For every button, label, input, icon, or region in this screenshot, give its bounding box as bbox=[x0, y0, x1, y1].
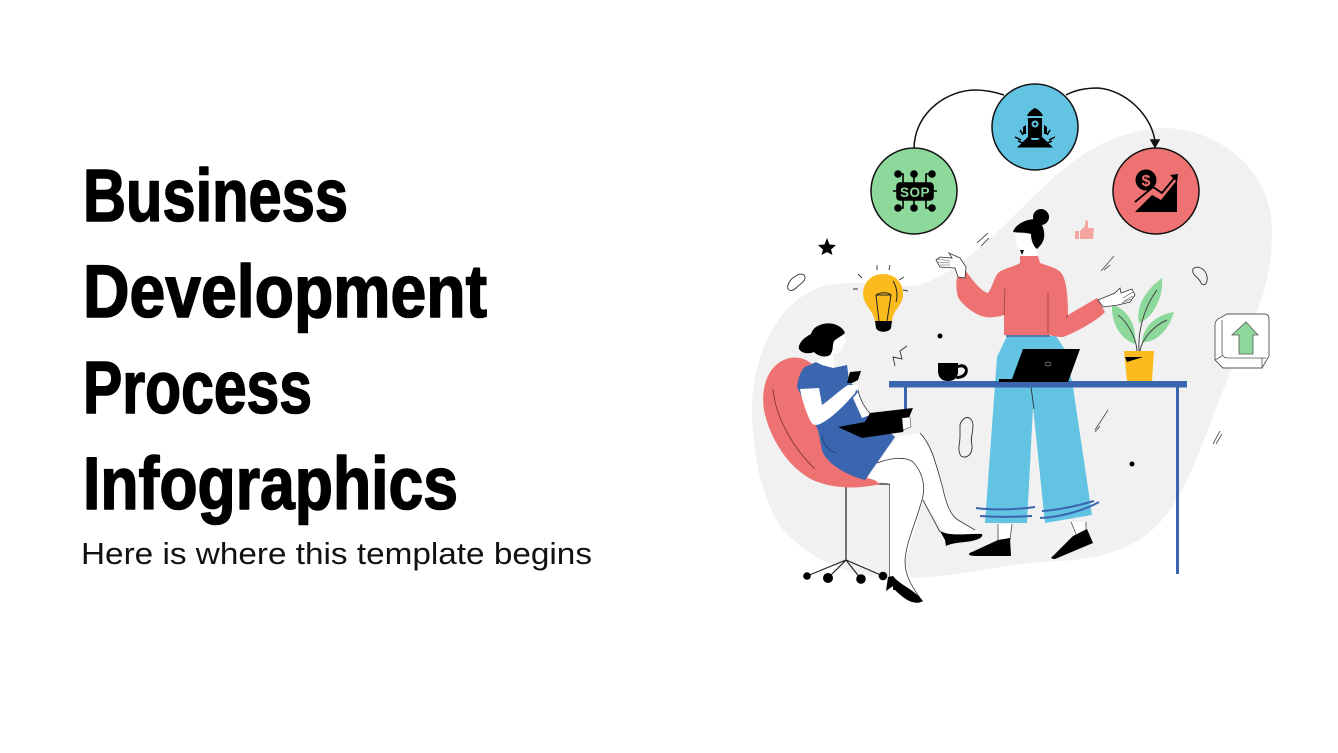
step: rocket circle bbox=[992, 84, 1078, 170]
table with items bbox=[889, 349, 1187, 574]
tablet bbox=[838, 408, 913, 438]
dress bbox=[797, 362, 895, 480]
step: revenue circle bbox=[1113, 148, 1199, 234]
legs bbox=[867, 433, 982, 600]
squiggle beans bbox=[788, 267, 1207, 457]
icon: star bbox=[818, 238, 836, 255]
shoes bbox=[969, 529, 1093, 559]
decorative marks bbox=[977, 233, 1222, 444]
process arrows bbox=[914, 88, 1159, 148]
neck bbox=[816, 352, 835, 368]
title: Process bbox=[83, 346, 312, 429]
title: Infographics bbox=[83, 442, 458, 525]
illustration background blob bbox=[752, 128, 1272, 578]
icon: thumbs up bbox=[1075, 220, 1094, 239]
chair base bbox=[807, 484, 890, 579]
waistband bbox=[1006, 334, 1050, 337]
ankles bbox=[998, 522, 1086, 540]
step: SOP circle bbox=[871, 148, 957, 234]
woman standing bbox=[936, 209, 1135, 559]
woman sitting bbox=[763, 323, 982, 603]
icon: light bulb bbox=[853, 265, 908, 332]
icon: SOP chip: SOP bbox=[900, 185, 930, 200]
title bbox=[83, 154, 487, 525]
title: Business bbox=[83, 154, 348, 237]
leaves bbox=[1112, 305, 1135, 344]
icon: dollar growth chart: $ bbox=[1142, 173, 1151, 190]
subtitle: Here is where this template begins bbox=[81, 536, 592, 571]
laptop bbox=[999, 349, 1080, 382]
face bbox=[832, 333, 845, 354]
arm bbox=[800, 385, 858, 425]
phone bbox=[847, 371, 861, 383]
plant bbox=[1112, 278, 1174, 381]
trouser cuffs bbox=[976, 501, 1099, 518]
hair bbox=[799, 323, 845, 356]
shoes bbox=[940, 531, 982, 546]
far forearm bbox=[853, 392, 870, 418]
sweater bbox=[956, 255, 1105, 337]
hand on tablet bbox=[902, 417, 911, 430]
icon: keyboard key with up arrow bbox=[1215, 314, 1269, 368]
face and neck bbox=[1015, 233, 1037, 256]
hair bbox=[1013, 219, 1044, 249]
trousers bbox=[985, 336, 1092, 523]
pot bbox=[1124, 351, 1154, 381]
chair seat bbox=[763, 358, 880, 487]
title: Development bbox=[83, 250, 487, 333]
coffee cup bbox=[938, 363, 968, 381]
hands bbox=[936, 253, 966, 278]
dots bbox=[938, 334, 1134, 466]
icon: rocket launch bbox=[1015, 108, 1055, 148]
